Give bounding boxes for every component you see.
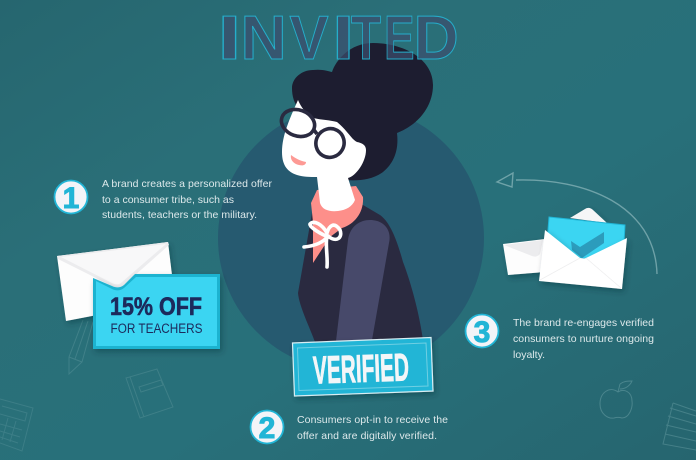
- character: [278, 43, 433, 342]
- back envelope: [503, 208, 607, 275]
- step 2 text: offer and are digitally verified.: [297, 430, 437, 442]
- face and neck: [282, 100, 366, 211]
- mouth: [291, 155, 306, 165]
- envelope with offer: 15% OFF: [110, 293, 202, 321]
- front envelope: [539, 230, 627, 289]
- step 1 text: [102, 178, 272, 221]
- step 2 badge: 2: [259, 412, 275, 445]
- offer card: [93, 274, 220, 349]
- blue card: [546, 217, 625, 262]
- step 3 text: consumers to nurture ongoing: [513, 333, 654, 345]
- title: [217, 4, 459, 73]
- title: D: [414, 4, 459, 73]
- step 2 text: Consumers opt-in to receive the: [297, 414, 448, 426]
- scarf: [311, 186, 363, 263]
- step 2 text: [297, 414, 448, 442]
- check mark: [571, 232, 604, 258]
- doodle: pencil: [69, 320, 93, 374]
- verified badge: VERIFIED: [312, 346, 410, 393]
- step 2 badge: [250, 410, 284, 445]
- step 1 text: A brand creates a personalized offer: [102, 178, 272, 190]
- step 1 text: students, teachers or the military.: [102, 209, 257, 221]
- doodle: open book: [663, 403, 696, 450]
- envelope: [57, 242, 175, 321]
- ribbon: [304, 222, 341, 267]
- step 3 text: loyalty.: [513, 349, 545, 361]
- arm: [336, 220, 390, 341]
- hair: [292, 43, 433, 180]
- arrow: [497, 173, 657, 274]
- body: [298, 205, 423, 342]
- doodle: apple: [600, 381, 632, 418]
- step 3 text: [513, 317, 654, 361]
- title: V: [290, 4, 328, 73]
- title: E: [384, 4, 415, 73]
- step 3 badge: [466, 314, 498, 349]
- step 1 text: to a consumer tribe, such as: [102, 194, 234, 206]
- envelope with offer: [57, 242, 220, 349]
- step 3 text: The brand re-engages verified: [513, 317, 654, 329]
- background circle: [218, 105, 484, 371]
- doodle: calculator: [0, 399, 33, 451]
- verified badge: [292, 338, 433, 396]
- title: T: [351, 4, 381, 73]
- step 3 badge: 3: [474, 316, 490, 349]
- title: N: [241, 4, 287, 73]
- envelope with offer: FOR TEACHERS: [110, 321, 202, 336]
- step 1 badge: 1: [63, 182, 79, 215]
- glasses: [278, 105, 349, 163]
- step 1 badge: [54, 180, 88, 215]
- title: I: [332, 4, 354, 73]
- doodle: notebook: [126, 369, 173, 418]
- title: I: [217, 4, 241, 73]
- envelopes with check: [503, 208, 627, 289]
